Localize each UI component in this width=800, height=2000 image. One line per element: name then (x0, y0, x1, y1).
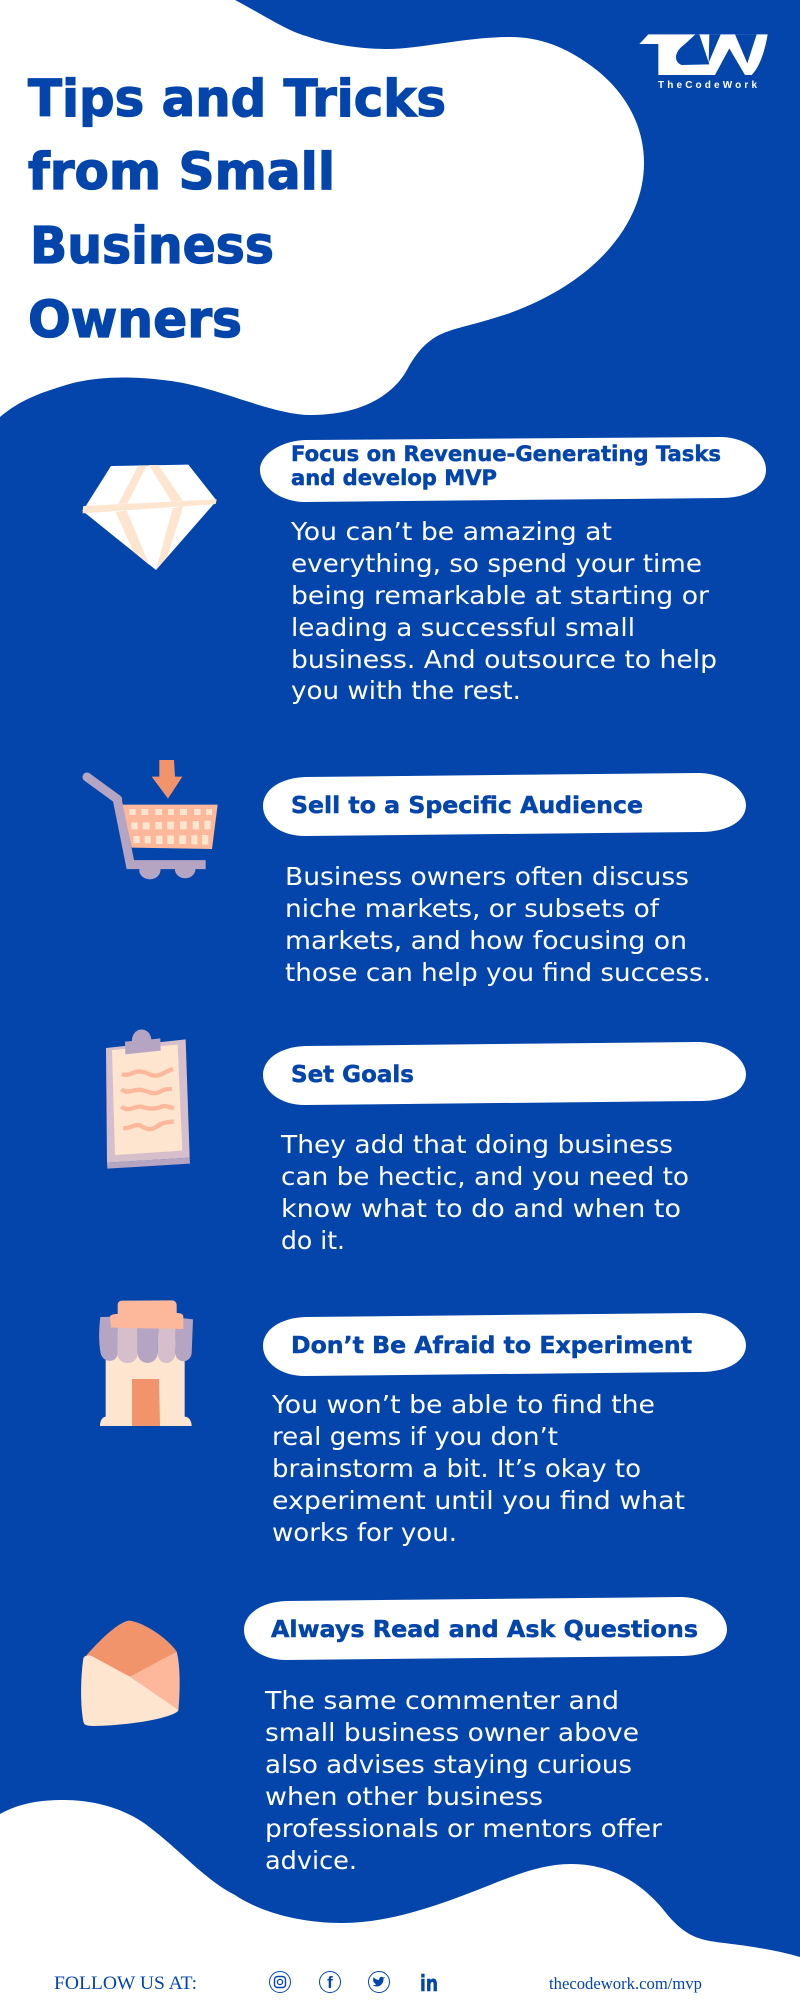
body text 2: those can help you find success. (285, 958, 711, 987)
icon: instagram (270, 1972, 290, 1992)
body text 1: everything, so spend your time (291, 549, 702, 578)
body text 2 (285, 862, 711, 987)
icon: facebook (320, 1972, 340, 1992)
body text 5: advice. (265, 1846, 357, 1875)
top white blob (0, 0, 644, 417)
title: from Small (28, 143, 335, 202)
section 2: specific audience (87, 760, 746, 987)
body text 3: They add that doing business (280, 1130, 673, 1159)
heading 5: Always Read and Ask Questions (271, 1615, 698, 1643)
heading 3: Set Goals (291, 1060, 414, 1088)
icon: facebook: f (327, 1973, 333, 1992)
heading 4: Don’t Be Afraid to Experiment (291, 1331, 692, 1359)
body text 1: business. And outsource to help (291, 645, 717, 674)
section 1: revenue tasks (83, 437, 766, 705)
title: Tips and Tricks (28, 70, 446, 129)
body text 5: professionals or mentors offer (265, 1814, 663, 1843)
body text 1 (290, 517, 717, 705)
logo: TheCodeWork (639, 34, 768, 91)
body text 3: can be hectic, and you need to (281, 1162, 689, 1191)
heading pill 4 (263, 1313, 746, 1376)
icon: envelope (81, 1621, 180, 1726)
icon: clipboard (106, 1029, 190, 1169)
heading 2: Sell to a Specific Audience (291, 791, 643, 819)
body text 3: do it. (281, 1226, 345, 1255)
body text 2: niche markets, or subsets of (285, 894, 660, 923)
heading 1 (291, 442, 721, 491)
logo: TheCodeWork: TheCodeWork (658, 80, 757, 91)
section 5: read and ask (81, 1597, 727, 1875)
body text 5: The same commenter and (264, 1686, 619, 1715)
body text 5: when other business (265, 1782, 543, 1811)
body text 2: markets, and how focusing on (285, 926, 687, 955)
heading 1: Focus on Revenue-Generating Tasks (291, 442, 721, 467)
title: Business (30, 217, 274, 276)
body text 4: You won’t be able to find the (271, 1390, 655, 1419)
section 3: set goals (106, 1029, 746, 1255)
body text 2: Business owners often discuss (285, 862, 689, 891)
body text 4: brainstorm a bit. It’s okay to (272, 1454, 641, 1483)
body text 5: also advises staying curious (265, 1750, 632, 1779)
body text 4: experiment until you find what (272, 1486, 685, 1515)
body text 1: leading a successful small (291, 613, 635, 642)
icon: diamond (83, 465, 217, 570)
heading 1: and develop MVP (291, 466, 497, 491)
body text 3 (280, 1130, 689, 1255)
body text 5: small business owner above (265, 1718, 639, 1747)
icon: twitter (368, 1972, 390, 1992)
icon: linkedin: in (420, 1972, 438, 1997)
heading pill 5 (244, 1597, 727, 1660)
body text 1: being remarkable at starting or (291, 581, 710, 610)
body text 1: You can’t be amazing at (290, 517, 612, 546)
icon: storefront (99, 1300, 193, 1426)
title: Owners (28, 291, 242, 350)
section 4: experiment (99, 1300, 746, 1547)
body text 4: real gems if you don’t (272, 1422, 558, 1451)
body text 5 (264, 1686, 663, 1875)
bottom white wave (0, 1800, 800, 2000)
heading pill 2 (263, 773, 746, 836)
icon: shopping cart (87, 760, 218, 879)
body text 1: you with the rest. (291, 676, 521, 705)
title (28, 70, 446, 350)
heading pill 3 (263, 1042, 746, 1105)
heading pill 1 (260, 437, 766, 502)
follow us label: FOLLOW US AT: (54, 1973, 197, 1994)
website url: thecodework.com/mvp (549, 1974, 702, 1993)
body text 4: works for you. (272, 1518, 457, 1547)
body text 4 (271, 1390, 685, 1547)
body text 3: know what to do and when to (281, 1194, 681, 1223)
social icons (270, 1972, 438, 1997)
